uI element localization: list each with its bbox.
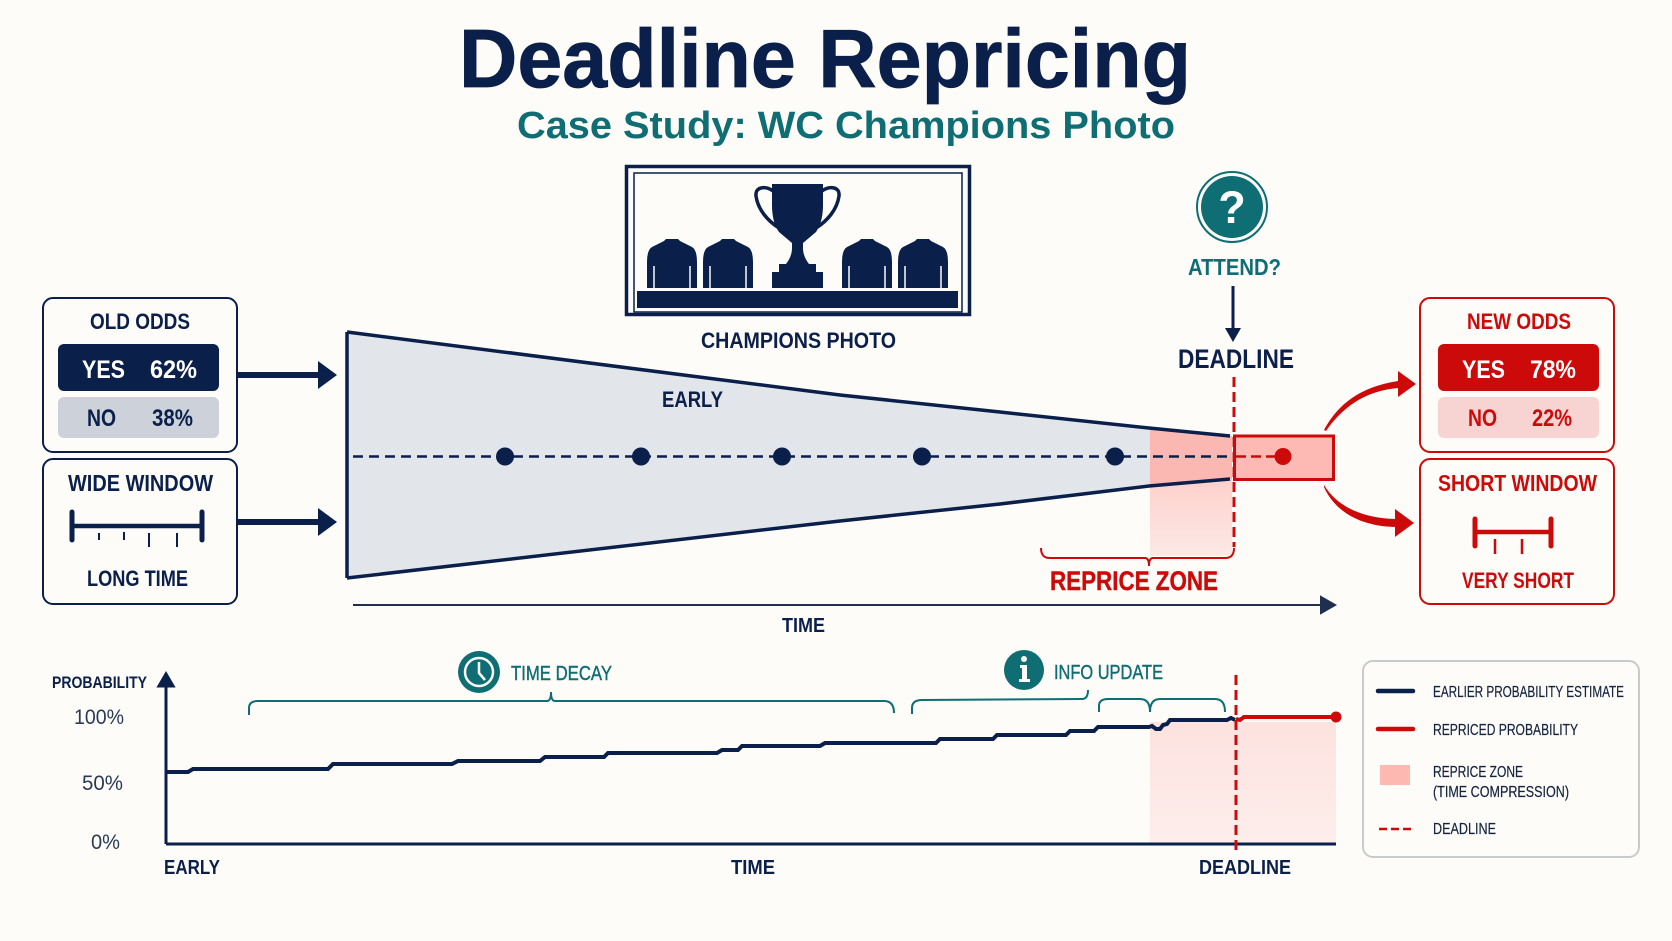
panel: wide window [43,459,237,604]
earlier probability line [166,718,1235,772]
panel: new odds: NO [1468,405,1497,432]
x axis labels [164,857,1291,879]
time decay label: TIME DECAY [511,663,612,685]
funnel chart [347,332,1232,578]
panel: old odds: 38% [152,405,193,432]
icon: champions photo frame [626,166,970,314]
legend: REPRICE ZONE [1433,764,1523,781]
panel: new odds: YES [1462,356,1505,384]
repriced probability line [1236,712,1342,722]
y axis labels [74,706,124,854]
icon: question mark [1197,172,1267,242]
icon: question mark: ? [1218,182,1246,233]
info update label: INFO UPDATE [1054,662,1163,684]
legend: REPRICED PROBABILITY [1433,722,1578,739]
y axis labels: 0% [91,831,120,854]
arrow: attend to deadline [1225,286,1241,342]
panel: new odds: 78% [1530,356,1576,384]
arrow: time [353,597,1335,613]
y axis labels: 50% [82,772,123,795]
icon: clock [458,651,500,693]
panel: old odds: NO [87,405,116,432]
chart deadline line [1234,675,1238,852]
x axis labels: EARLY [164,857,221,879]
arrow: old odds to funnel [237,361,337,389]
reprice zone label: REPRICE ZONE [1050,566,1218,596]
legend [1363,661,1639,857]
panel: old odds: 62% [150,356,197,384]
panel: new odds: 22% [1532,405,1572,432]
panel: short window: SHORT WINDOW [1438,470,1597,496]
x axis labels: DEADLINE [1199,857,1291,879]
time decay bracket [249,692,894,715]
panel: new odds [1420,298,1614,452]
panel: old odds: OLD ODDS [90,309,190,334]
info update brackets [912,690,1225,714]
title: Deadline Repricing [459,12,1191,105]
reprice zone shading in chart [1150,722,1336,843]
panel: new odds: NEW ODDS [1467,309,1571,334]
panel: wide window: LONG TIME [87,566,188,591]
arrow: curved to new odds [1324,371,1416,431]
arrow: wide window to funnel [237,508,337,536]
legend: DEADLINE [1433,821,1496,838]
panel: old odds: YES [82,356,125,384]
y axis labels: 100% [74,706,124,729]
panel: old odds [43,298,237,452]
funnel chart: EARLY [662,387,723,412]
legend: (TIME COMPRESSION) [1433,784,1569,801]
x axis labels: TIME [731,857,775,879]
repriced box [1234,436,1334,480]
attend label: ATTEND? [1188,254,1281,280]
icon: info [1004,650,1044,690]
panel: wide window: WIDE WINDOW [68,470,213,496]
y axis title: PROBABILITY [52,674,147,692]
reprice zone shading [1150,428,1232,556]
time label: TIME [782,615,825,637]
arrow: curved to short window [1324,485,1414,537]
probability chart [52,674,1342,879]
subtitle: Case Study: WC Champions Photo [517,105,1175,147]
chart axes [159,674,1336,844]
deadline dashed line [1232,377,1236,547]
deadline label: DEADLINE [1178,344,1294,374]
reprice zone bracket [1041,548,1234,566]
champions photo label: CHAMPIONS PHOTO [701,328,896,353]
panel: short window [1420,459,1614,604]
panel: short window: VERY SHORT [1462,568,1574,593]
